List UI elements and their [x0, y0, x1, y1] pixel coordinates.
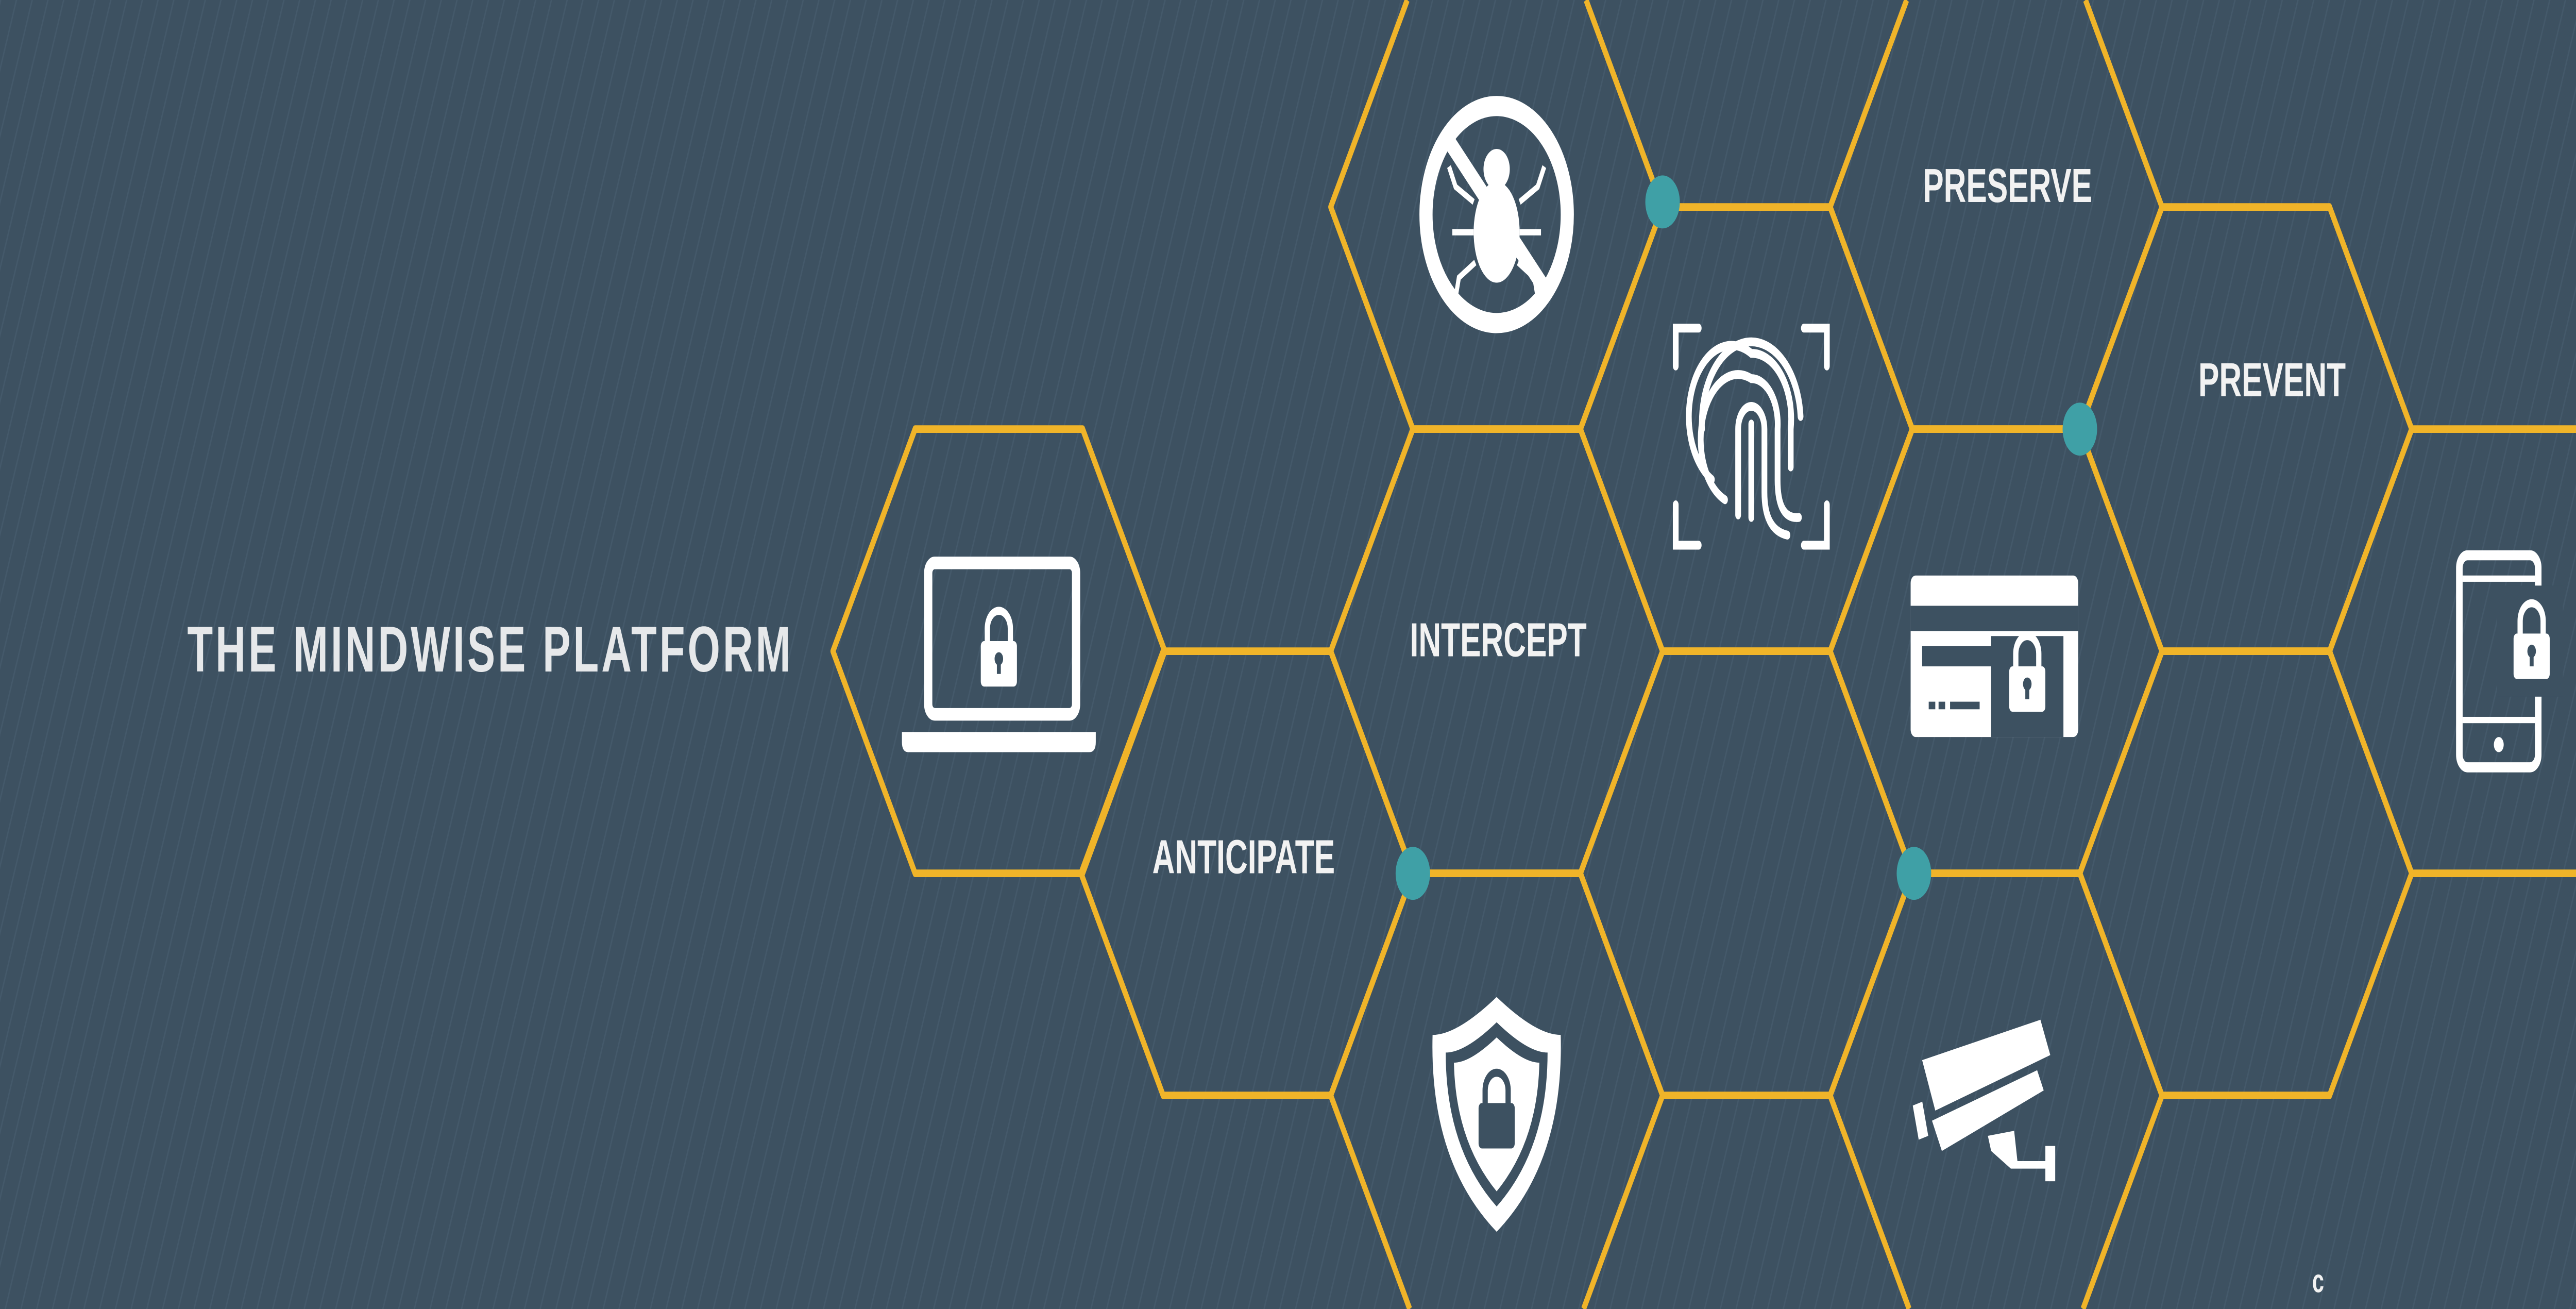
footnote c: c — [2312, 1263, 2324, 1300]
title: THE MINDWISE PLATFORM — [188, 614, 793, 685]
icon: laptop — [902, 563, 1096, 752]
honeycomb grid — [833, 0, 2576, 1309]
label: preserve: PRESERVE — [1923, 159, 2092, 212]
connector dots — [1396, 175, 2097, 900]
label: anticipate: ANTICIPATE — [1153, 830, 1335, 884]
icon: cctv camera — [1913, 1020, 2055, 1181]
icon: fingerprint — [1676, 328, 1827, 545]
icon: no bug — [1426, 106, 1567, 323]
label: intercept: INTERCEPT — [1410, 613, 1587, 667]
label: prevent: PREVENT — [2198, 353, 2346, 407]
icon: shield — [1432, 997, 1561, 1232]
icon: credit card lock — [1911, 576, 2078, 737]
icon: phone lock — [2460, 556, 2563, 767]
